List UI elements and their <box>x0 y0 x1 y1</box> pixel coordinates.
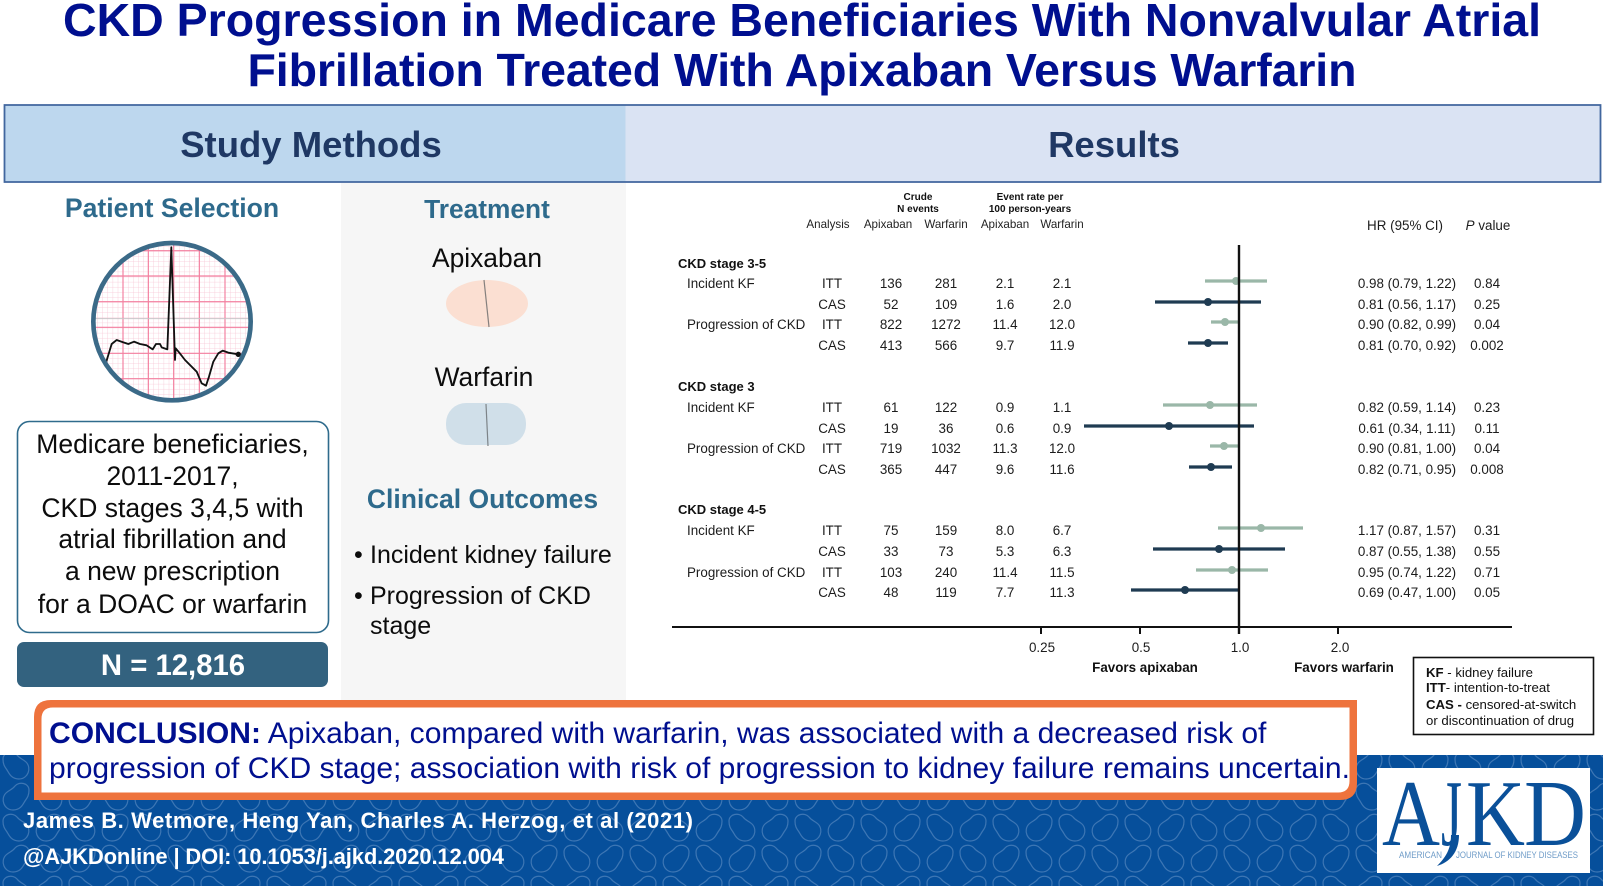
table: CKD stage 3-5: 0.81 (0.70, 0.92) <box>1358 338 1456 353</box>
table column headers: P value <box>1466 218 1510 233</box>
logo: AJKD <box>1377 762 1590 873</box>
legend: abbreviations: or discontinuation of drug <box>1426 713 1574 728</box>
table: CKD stage 3-5: 1.6 <box>996 297 1014 312</box>
callout: conclusion: CONCLUSION: Apixaban, compared with warfarin, was associated with a decreased risk of <box>49 717 1267 750</box>
callout: conclusion <box>34 700 1357 800</box>
table: CKD stage 3: Progression of CKD <box>687 441 806 456</box>
table: CKD stage 3-5: 413 <box>880 338 902 353</box>
table: CKD stage 3: 0.04 <box>1474 441 1501 456</box>
heading: treatment: Treatment <box>424 194 550 224</box>
title: Fibrillation Treated With Apixaban Versus Warfarin <box>248 44 1356 96</box>
icon: ECG in circle <box>92 240 255 404</box>
forest plot <box>672 245 1512 675</box>
table: CKD stage 4-5: 33 <box>884 544 898 559</box>
header band <box>4 105 1600 182</box>
table column headers: HR (95% CI) <box>1367 218 1443 233</box>
table: CKD stage 3-5: 9.7 <box>996 338 1014 353</box>
table: CKD stage 3-5: 12.0 <box>1049 317 1075 332</box>
table: CKD stage 4-5: 0.69 (0.47, 1.00) <box>1358 585 1456 600</box>
table: CKD stage 3: 0.008 <box>1470 462 1504 477</box>
x axis: 0.5 <box>1132 640 1150 655</box>
table: CKD stage 4-5: 240 <box>935 565 957 580</box>
citation: James B. Wetmore, Heng Yan, Charles A. Herzog, et al (2021) <box>23 808 693 833</box>
table: CKD stage 4-5: 119 <box>935 585 957 600</box>
table: CKD stage 4-5: 11.5 <box>1049 565 1075 580</box>
table: CKD stage 3: 719 <box>880 441 902 456</box>
table: CKD stage 3: 61 <box>884 400 898 415</box>
table: CKD stage 3: 19 <box>884 421 898 436</box>
table: CKD stage 3-5: 2.1 <box>996 276 1014 291</box>
table column headers <box>806 192 1510 233</box>
table column headers: Apixaban <box>864 218 912 231</box>
table: CKD stage 3: 365 <box>880 462 902 477</box>
logo: AJKD: D <box>1524 762 1586 866</box>
list: clinical outcomes: Incident kidney failure <box>370 541 612 569</box>
table: CKD stage 3-5: 566 <box>935 338 957 353</box>
table column headers: 100 person-years <box>989 204 1072 215</box>
table: CKD stage 3: 0.90 (0.81, 1.00) <box>1358 441 1456 456</box>
table: CKD stage 3: 0.82 (0.71, 0.95) <box>1358 462 1456 477</box>
header: study methods <box>4 105 626 182</box>
table: CKD stage 3-5: CKD stage 3-5 <box>678 256 766 271</box>
table: CKD stage 4-5: 8.0 <box>996 523 1014 538</box>
table: CKD stage 3-5: 109 <box>935 297 957 312</box>
logo: AJKD: J <box>1441 762 1462 866</box>
table: CKD stage 4-5: 0.87 (0.55, 1.38) <box>1358 544 1456 559</box>
table column headers: Analysis <box>806 218 850 231</box>
table column headers: Apixaban <box>981 218 1029 231</box>
header: study methods: Study Methods <box>180 124 442 165</box>
x axis: 1.0 <box>1231 640 1249 655</box>
table: CKD stage 4-5: 7.7 <box>996 585 1014 600</box>
table: CKD stage 4-5: 6.7 <box>1053 523 1071 538</box>
table: CKD stage 3: 0.6 <box>996 421 1014 436</box>
table: CKD stage 3-5: 136 <box>880 276 902 291</box>
logo: AJKD: A <box>1382 762 1440 866</box>
table: CKD stage 3: ITT <box>822 441 842 456</box>
table: CKD stage 3-5: 0.84 <box>1474 276 1501 291</box>
list: clinical outcomes: Progression of CKD <box>370 582 591 610</box>
axis direction labels <box>1092 660 1394 675</box>
table: CKD stage 3-5: 822 <box>880 317 902 332</box>
panel: treatment and outcomes background <box>341 183 626 708</box>
table: CKD stage 3: 9.6 <box>996 462 1014 477</box>
callout: sample size: N = 12,816 <box>101 649 245 682</box>
legend: abbreviations <box>1414 658 1594 734</box>
table: CKD stage 4-5 <box>678 502 1500 600</box>
table: CKD stage 3-5: 52 <box>884 297 898 312</box>
table: CKD stage 3-5: 1272 <box>931 317 961 332</box>
table: CKD stage 4-5: ITT <box>822 523 842 538</box>
citation: @AJKDonline | DOI: 10.1053/j.ajkd.2020.12.004 <box>23 844 505 869</box>
citation <box>23 808 693 869</box>
table: CKD stage 4-5: 159 <box>935 523 957 538</box>
footer band with kidney pattern <box>0 755 1603 886</box>
table: CKD stage 4-5: 0.71 <box>1474 565 1500 580</box>
axis direction labels: Favors warfarin <box>1294 660 1394 675</box>
table: CKD stage 3-5: 2.0 <box>1053 297 1071 312</box>
text block: patient population: atrial fibrillation and <box>58 524 287 554</box>
x axis: 0.25 <box>1029 640 1055 655</box>
table: CKD stage 3: 0.9 <box>1053 421 1071 436</box>
table: CKD stage 3-5: 0.98 (0.79, 1.22) <box>1358 276 1456 291</box>
table: CKD stage 3: 0.23 <box>1474 400 1500 415</box>
table: CKD stage 4-5: 11.4 <box>992 565 1018 580</box>
table: CKD stage 3: CAS <box>818 421 846 436</box>
table: CKD stage 3-5: 281 <box>935 276 957 291</box>
text block: patient population <box>18 422 328 632</box>
legend: abbreviations: CAS - censored-at-switch <box>1426 697 1576 712</box>
table: CKD stage 3: 11.3 <box>992 441 1018 456</box>
axis direction labels: Favors apixaban <box>1092 660 1198 675</box>
list: clinical outcomes: • <box>354 541 363 569</box>
table: CKD stage 4-5: CAS <box>818 585 846 600</box>
header: results: Results <box>1048 124 1180 165</box>
table: CKD stage 3: CAS <box>818 462 846 477</box>
table: CKD stage 3-5: 0.81 (0.56, 1.17) <box>1358 297 1456 312</box>
table: CKD stage 4-5: 0.55 <box>1474 544 1500 559</box>
table: CKD stage 3: 12.0 <box>1049 441 1075 456</box>
forest plot intervals: intention-to-treat <box>1163 277 1303 574</box>
reference line at HR 1.0 <box>1238 245 1240 634</box>
table: CKD stage 4-5: 48 <box>884 585 898 600</box>
table: CKD stage 3-5: 0.04 <box>1474 317 1501 332</box>
table: CKD stage 4-5: 103 <box>880 565 902 580</box>
table: CKD stage 4-5: 6.3 <box>1053 544 1071 559</box>
list: clinical outcomes: stage <box>370 612 431 640</box>
table: CKD stage 3-5 <box>678 256 1504 353</box>
forest plot intervals: censored-at-switch <box>1084 298 1285 594</box>
text block: patient population: CKD stages 3,4,5 with <box>41 493 304 523</box>
table: CKD stage 3-5: 2.1 <box>1053 276 1071 291</box>
text block: patient population: a new prescription <box>65 556 280 586</box>
table: CKD stage 3-5: 0.002 <box>1470 338 1504 353</box>
logo: AJKD: JOURNAL OF KIDNEY DISEASES <box>1456 850 1578 860</box>
table: CKD stage 3-5: Progression of CKD <box>687 317 806 332</box>
logo: AJKD: AMERICAN <box>1399 850 1442 860</box>
table: CKD stage 4-5: CKD stage 4-5 <box>678 502 766 517</box>
table: CKD stage 4-5: 0.31 <box>1474 523 1500 538</box>
list: clinical outcomes <box>354 541 612 640</box>
table: CKD stage 4-5: ITT <box>822 565 842 580</box>
table: CKD stage 3-5: 0.25 <box>1474 297 1500 312</box>
legend: abbreviations: ITT- intention-to-treat <box>1426 680 1550 695</box>
table: CKD stage 4-5: Progression of CKD <box>687 565 806 580</box>
label: warfarin: Warfarin <box>435 362 533 392</box>
logo: AJKD: K <box>1466 762 1525 866</box>
table column headers: Event rate per <box>997 192 1063 203</box>
table: CKD stage 4-5: 1.17 (0.87, 1.57) <box>1358 523 1456 538</box>
table: CKD stage 4-5: Incident KF <box>687 523 755 538</box>
text block: patient population: Medicare beneficiaries, <box>36 429 309 459</box>
table: CKD stage 3 <box>678 379 1504 477</box>
table: CKD stage 3: 122 <box>935 400 957 415</box>
table: CKD stage 4-5: 5.3 <box>996 544 1014 559</box>
table: CKD stage 3: 1032 <box>931 441 961 456</box>
table: CKD stage 3-5: 0.90 (0.82, 0.99) <box>1358 317 1456 332</box>
table: CKD stage 3-5: 11.4 <box>992 317 1018 332</box>
table: CKD stage 3: 0.11 <box>1474 421 1500 436</box>
table: CKD stage 4-5: 73 <box>939 544 953 559</box>
table: CKD stage 4-5: 0.05 <box>1474 585 1500 600</box>
table: CKD stage 3-5: Incident KF <box>687 276 755 291</box>
text block: patient population: for a DOAC or warfarin <box>38 589 307 619</box>
table column headers: N events <box>897 204 939 215</box>
table: CKD stage 3-5: 11.9 <box>1049 338 1075 353</box>
legend: abbreviations: KF - kidney failure <box>1426 665 1533 680</box>
table: CKD stage 4-5: 0.95 (0.74, 1.22) <box>1358 565 1456 580</box>
x axis: 2.0 <box>1331 640 1349 655</box>
table: CKD stage 3: CKD stage 3 <box>678 379 755 394</box>
table: CKD stage 3: 0.61 (0.34, 1.11) <box>1358 421 1456 436</box>
table: CKD stage 3-5: ITT <box>822 317 842 332</box>
heading: patient selection: Patient Selection <box>65 193 279 223</box>
table: CKD stage 3-5: ITT <box>822 276 842 291</box>
table: CKD stage 3: 0.82 (0.59, 1.14) <box>1358 400 1456 415</box>
table: CKD stage 4-5: 11.3 <box>1049 585 1075 600</box>
heading: clinical outcomes: Clinical Outcomes <box>367 484 598 514</box>
table: CKD stage 4-5: CAS <box>818 544 846 559</box>
title <box>63 0 1541 96</box>
icon: warfarin pill <box>446 403 526 446</box>
table: CKD stage 3: 447 <box>935 462 957 477</box>
x axis <box>672 627 1512 655</box>
table: CKD stage 3-5: CAS <box>818 338 846 353</box>
table: CKD stage 3: Incident KF <box>687 400 755 415</box>
list: clinical outcomes: • <box>354 582 363 610</box>
table column headers: Warfarin <box>924 218 968 231</box>
icon: apixaban pill <box>446 280 528 327</box>
header: results <box>626 105 1600 182</box>
text block: patient population: 2011-2017, <box>106 461 239 491</box>
callout: conclusion: progression of CKD stage; association with risk of progression to kidney failure remains uncertain. <box>49 752 1350 785</box>
table column headers: Crude <box>904 192 933 203</box>
table: CKD stage 3-5: CAS <box>818 297 846 312</box>
label: apixaban: Apixaban <box>432 243 542 273</box>
callout: sample size <box>17 642 328 687</box>
table: CKD stage 3: ITT <box>822 400 842 415</box>
table: CKD stage 3: 36 <box>939 421 953 436</box>
table: CKD stage 3: 1.1 <box>1053 400 1071 415</box>
table: CKD stage 4-5: 75 <box>884 523 898 538</box>
table column headers: Warfarin <box>1040 218 1084 231</box>
table: CKD stage 3: 11.6 <box>1049 462 1075 477</box>
table: CKD stage 3: 0.9 <box>996 400 1014 415</box>
